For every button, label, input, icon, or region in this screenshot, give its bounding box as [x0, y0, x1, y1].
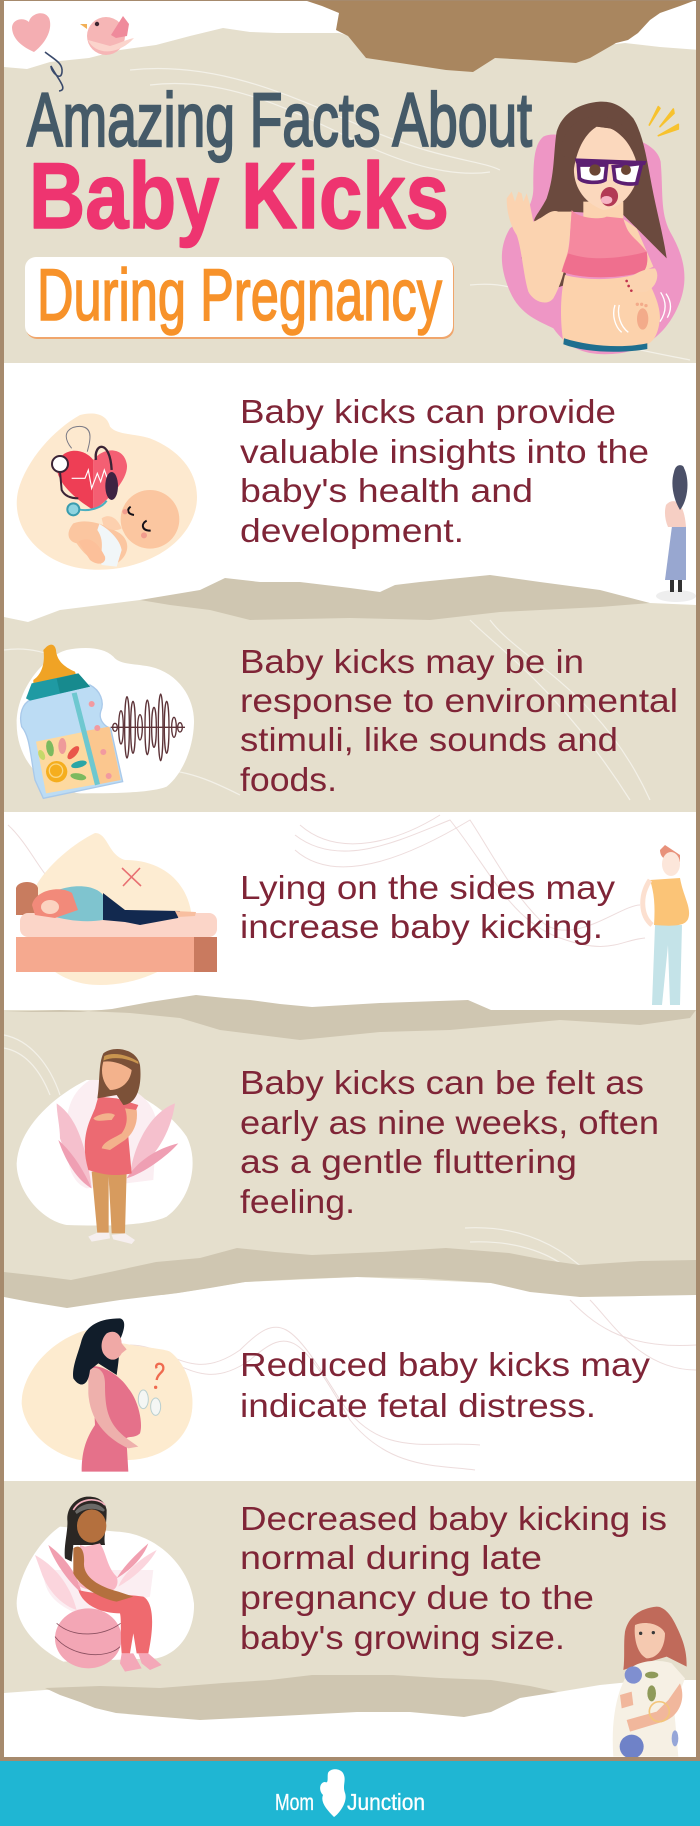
fact text 2: Baby kicks may be in: [240, 643, 584, 680]
icon: pink bird: [80, 16, 134, 55]
fact text 6: normal during late: [240, 1539, 542, 1576]
footer frame line: [0, 1757, 700, 1761]
torn brown paper: [304, 0, 696, 72]
illustration: woman lying on bed with red cross: [16, 833, 217, 985]
fact text 2: [240, 643, 678, 798]
fact text 4: [240, 1064, 659, 1220]
panel: section 1 background: [4, 363, 696, 815]
fact text 4: feeling.: [240, 1183, 355, 1220]
illustration: pregnant woman with leaves: [17, 1049, 193, 1244]
fact text 6: [240, 1500, 667, 1656]
fact text 6: Decreased baby kicking is: [240, 1500, 667, 1537]
panel: section 3 background: [4, 812, 696, 1010]
logo: MomJunction: [275, 1769, 425, 1817]
illustration: worried pregnant woman: [22, 1318, 192, 1472]
illustration: heart monitor and sleeping baby: [17, 414, 197, 570]
fact text 6: pregnancy due to the: [240, 1579, 594, 1616]
fact text 5: [240, 1346, 651, 1424]
illustration: woman standing, right of fact 3: [643, 845, 689, 1017]
fact text 3: increase baby kicking.: [240, 908, 603, 945]
fact text 3: [240, 869, 616, 945]
wave lines, section 2: [4, 620, 650, 800]
fact text 3: Lying on the sides may: [240, 869, 616, 906]
title line: Baby Kicks: Baby Kicks: [29, 143, 449, 248]
panel: section 4 background: [4, 1010, 696, 1295]
wave lines, section 4: [4, 1035, 590, 1275]
fact text 1: baby's health and: [240, 472, 533, 509]
torn paper strip 1: [140, 575, 650, 620]
panel: header background: [0, 0, 700, 363]
illustration: woman standing, right of fact 1: [656, 465, 696, 602]
illustration: surprised pregnant woman: [502, 102, 684, 354]
subtitle badge: During Pregnancy: [25, 255, 454, 339]
fact text 5: indicate fetal distress.: [240, 1387, 596, 1424]
fact text 4: as a gentle fluttering: [240, 1143, 577, 1180]
illustration: woman in floral dress, bottom right: [613, 1607, 687, 1759]
fact text 2: foods.: [240, 761, 337, 798]
icon: heart balloon: [12, 13, 63, 91]
panel: section 6 background: [4, 1481, 696, 1693]
footer bar: [0, 1761, 700, 1826]
illustration: baby bottle and sound wave: [17, 645, 194, 798]
logo: MomJunction: Mom: [275, 1789, 314, 1815]
fact text 1: valuable insights into the: [240, 433, 649, 470]
panel: section 5 background: [4, 1277, 696, 1481]
logo: MomJunction: Junction: [347, 1789, 425, 1815]
torn paper strip 3: [4, 995, 696, 1040]
fact text 1: Baby kicks can provide: [240, 393, 616, 430]
fact text 2: stimuli, like sounds and: [240, 721, 618, 758]
panel: bottom white area: [4, 1680, 696, 1757]
torn paper strip 4: [4, 1248, 696, 1308]
fact text 4: early as nine weeks, often: [240, 1104, 659, 1141]
illustration: pregnant woman sitting on exercise ball: [17, 1497, 194, 1672]
fact text 6: baby's growing size.: [240, 1619, 565, 1656]
fact text 1: [240, 393, 649, 549]
fact text 4: Baby kicks can be felt as: [240, 1064, 644, 1101]
fact text 5: Reduced baby kicks may: [240, 1346, 651, 1383]
torn paper strip 6: [45, 1675, 558, 1720]
fact text 1: development.: [240, 512, 464, 549]
wave lines, section 3: [8, 815, 645, 946]
wave lines, section 5: [130, 1300, 696, 1470]
fact text 2: response to environmental: [240, 682, 678, 719]
subtitle badge: During Pregnancy: During Pregnancy: [37, 255, 442, 336]
